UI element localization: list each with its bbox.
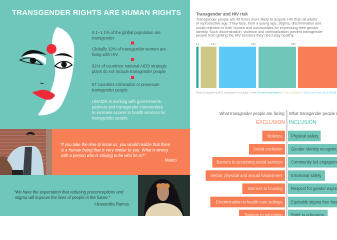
bar labels: 12x bbox=[211, 42, 216, 46]
column headings bbox=[219, 111, 337, 116]
bar labels: 26x bbox=[251, 42, 256, 46]
fact: AIDS plans: 61% of countries' national AIDS strategic bbox=[92, 64, 167, 68]
text block: HIV risk description: identity. Such discrimination, violence and criminalization prevent transgender bbox=[196, 30, 323, 34]
quote: Alessandra Ramos: stigma will improve the lives of people in the future.” bbox=[15, 195, 111, 200]
illustration: face bbox=[20, 27, 74, 115]
row: social exclusion: Social exclusion bbox=[253, 147, 283, 152]
bar labels: 1x bbox=[196, 42, 200, 46]
bar: sex workers bbox=[201, 47, 216, 88]
heading: HIV risk: Transgender and HIV risk bbox=[196, 12, 248, 16]
fact: criminalize: 57 countries criminalize or prosecute bbox=[92, 82, 159, 87]
row: housing: Barriers to housing bbox=[248, 186, 283, 191]
row: health care: Discrimination in health care settings bbox=[216, 199, 282, 204]
marker bbox=[131, 76, 134, 79]
bar labels bbox=[196, 42, 296, 46]
fact: AIDS plans: plans do not include transgender people bbox=[92, 69, 166, 74]
photo: woman with sunglasses bbox=[138, 175, 190, 216]
chart: inclusion bars bbox=[288, 131, 337, 220]
row: physical safety: Physical safety bbox=[291, 134, 319, 138]
quote: Marco: “If you take the time to know us, you would realize that there bbox=[60, 142, 170, 147]
text block: UNAIDS: partners and transgender communities bbox=[92, 104, 163, 110]
marker bbox=[131, 58, 134, 61]
fact: HIV: living with HIV bbox=[92, 52, 118, 57]
quote: Marco: Marco bbox=[165, 158, 177, 162]
panel: left teal background bbox=[0, 0, 190, 216]
heading: facing: What transgender people are facing bbox=[219, 111, 285, 116]
photo: man against brick wall bbox=[0, 129, 52, 175]
bar: people who inject drugs bbox=[258, 47, 296, 88]
fact: HIV: Globally 19% of transgender women are bbox=[92, 46, 166, 52]
label: exclusion: EXCLUSION bbox=[256, 120, 285, 126]
quote: Alessandra Ramos: “We have the expectation that reducing preconceptions and bbox=[14, 190, 123, 194]
bar labels: 34x bbox=[291, 42, 296, 46]
chart: HIV risk bars bbox=[196, 42, 337, 88]
center divider bbox=[286, 110, 287, 216]
text block: HIV risk description: Transgender people are 49 times more likely to acquire HIV than all adults bbox=[196, 18, 317, 22]
fact: population: 0.1–1.1% of the global population are bbox=[92, 30, 161, 35]
text block: HIV risk description: people from getting the HIV services they need stay healthy. bbox=[196, 34, 294, 38]
text block: UNAIDS: transgender people bbox=[92, 116, 128, 120]
fact: population: transgender bbox=[92, 36, 115, 40]
row: harassment: Verbal, physical and sexual harassment bbox=[210, 173, 283, 178]
text block: HIV risk description: of reproductive age. They face, from a young age, stigma, discrimination and bbox=[196, 22, 321, 26]
chart: exclusion bars bbox=[206, 131, 285, 220]
marker bbox=[131, 42, 134, 44]
quote: Alessandra Ramos: Alessandra Ramos bbox=[94, 202, 129, 206]
text block: facts bbox=[92, 30, 167, 92]
bar: transgender bbox=[298, 47, 337, 88]
row: social services: Barriers to accessing social services bbox=[217, 160, 282, 165]
bar: general population bbox=[196, 47, 198, 88]
quote: Marco: with a person who is striving to be who he is?” bbox=[61, 153, 146, 158]
text block: HIV risk description: social rejection in their homes and communities for expressing their gender bbox=[196, 26, 319, 30]
quote: Marco: is a human being that is very similar to you. What is wrong bbox=[61, 148, 168, 152]
bar: gay men bbox=[219, 47, 256, 88]
text block: UNAIDS: UNAIDS is working with governments, bbox=[92, 99, 162, 104]
label: inclusion: INCLUSION bbox=[289, 120, 317, 126]
fact: criminalize: transgender people bbox=[92, 88, 128, 92]
panel: orange quote band bbox=[52, 129, 190, 175]
row: emotional safety: Emotional safety bbox=[291, 173, 322, 178]
title: TRANSGENDER RIGHTS ARE HUMAN RIGHTS bbox=[12, 8, 181, 17]
text block: UNAIDS: to increase access to health services for bbox=[92, 110, 166, 115]
row: violence: Violence bbox=[267, 134, 283, 138]
